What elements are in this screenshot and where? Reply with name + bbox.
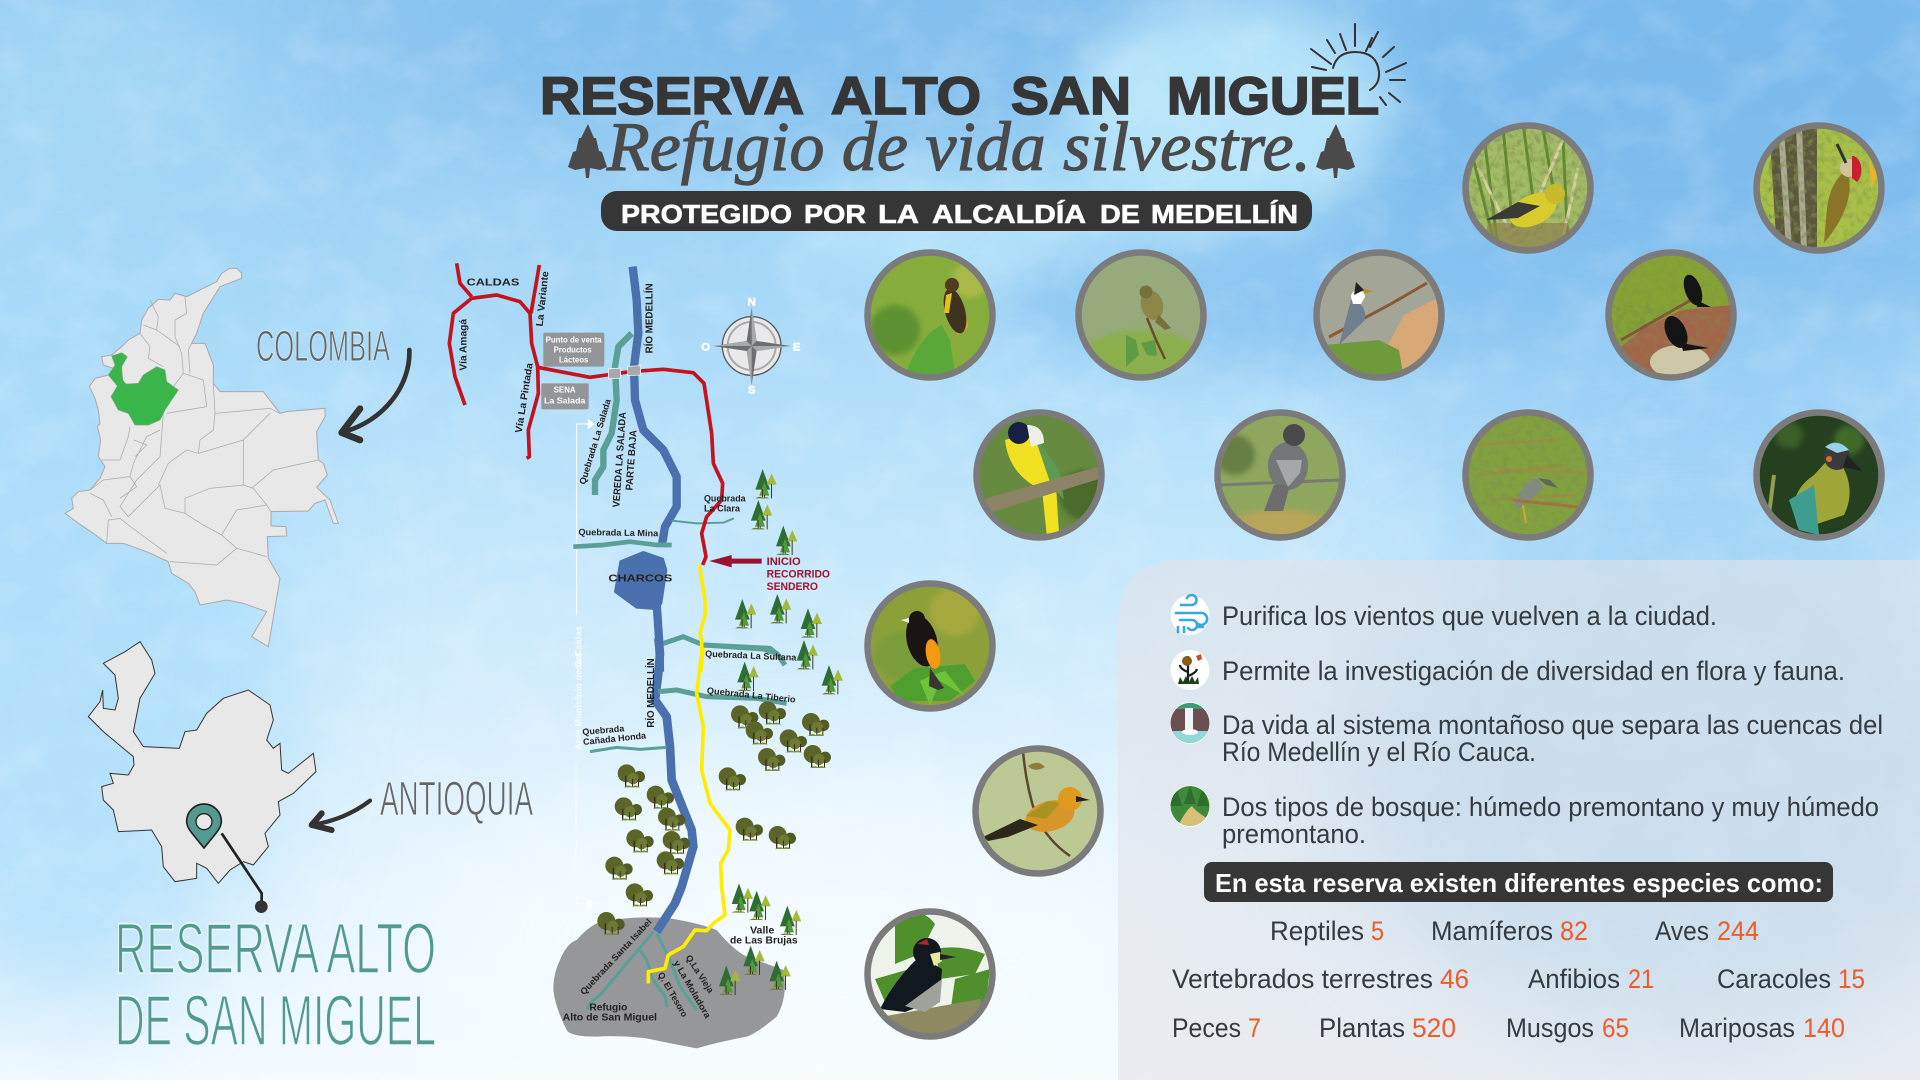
start-of-trail label: INICIO	[767, 556, 801, 568]
text: research: Permite la investigación de diversidad en flora y fauna.	[1222, 656, 1845, 686]
bird photo: kingfisher	[1314, 250, 1444, 380]
location pin and leader	[187, 804, 268, 913]
compass rose: S	[748, 384, 756, 396]
icon: right pine	[1316, 124, 1355, 178]
text: mountain system: Río Medellín y el Río Cauca.	[1222, 737, 1536, 767]
river Medellin	[655, 638, 693, 932]
sales point box: Lácteos	[559, 356, 589, 365]
creek La Sultana	[703, 645, 780, 657]
map labels: VEREDA LA SALADA	[611, 412, 629, 508]
map labels	[563, 649, 798, 1024]
species counts: 15	[1838, 964, 1865, 994]
species counts: 7	[1248, 1013, 1261, 1043]
start-of-trail arrow	[709, 555, 762, 567]
map labels: Quebrada La Tiberio	[706, 685, 797, 705]
map labels: Quebrada La Sultana	[705, 649, 798, 663]
map labels: La Variante	[535, 270, 551, 327]
map of Colombia	[65, 268, 338, 647]
subtitle: Refugio de vida silvestre: Refugio de vida silvestre.	[606, 109, 1311, 186]
species counts: 46	[1440, 964, 1469, 994]
map labels: y La Moladora	[672, 959, 713, 1021]
map labels: Quebrada La Salada	[577, 397, 613, 486]
title: Reserva Alto San Miguel: ALTO	[831, 67, 981, 126]
text: mountain system	[1222, 710, 1883, 767]
map labels: Refugio	[589, 1003, 627, 1014]
map labels: CHARCOS	[608, 574, 673, 585]
species counts: Reptiles	[1270, 916, 1364, 946]
map labels: Quebrada	[582, 723, 626, 737]
species heading bar: En esta reserva existen diferentes especies como:	[1215, 868, 1823, 898]
creek La Sultana	[662, 637, 785, 665]
panel: reserve facts	[1118, 560, 1920, 1080]
label: Reserva Alto de San Miguel	[115, 910, 436, 1061]
compass rose: E	[793, 342, 801, 354]
icon: forest	[1170, 785, 1210, 827]
title: Reserva Alto San Miguel: SAN	[1011, 67, 1131, 126]
pine clusters	[735, 469, 822, 638]
start-of-trail label: SENDERO	[767, 581, 818, 593]
map of Antioquia	[88, 642, 316, 913]
species counts: Musgos	[1506, 1013, 1594, 1043]
species counts: 140	[1803, 1013, 1845, 1043]
banner: protected by Medellin	[601, 191, 1312, 231]
species counts: Aves	[1655, 916, 1709, 946]
map labels: RÍO MEDELLÍN	[643, 283, 656, 353]
map labels: Vía La Pintada	[514, 362, 536, 434]
municipality label: de Caldas	[574, 626, 584, 670]
species counts: 82	[1560, 916, 1588, 946]
map labels: Q. El Tesoro	[656, 970, 690, 1019]
icon: left pine	[568, 124, 607, 178]
map labels: PARTE BAJA	[624, 430, 640, 491]
creeks in refuge	[587, 932, 697, 1010]
map labels: Alto de San Miguel	[563, 1013, 657, 1024]
bird photo: motmot	[1754, 410, 1884, 540]
map labels: Vía Amagá	[459, 319, 470, 371]
map labels: de Las Brujas	[730, 935, 798, 946]
bird photo: golden tanager	[973, 746, 1103, 876]
icon: waterfall	[1170, 702, 1210, 744]
map labels: Quebrada	[704, 494, 747, 504]
title: Reserva Alto San Miguel	[540, 67, 1379, 126]
arrow: Colombia	[342, 350, 409, 440]
start-of-trail label	[767, 556, 830, 593]
round tree clusters	[597, 701, 831, 935]
sales point box: Productos	[554, 345, 592, 354]
Charcos lake	[615, 552, 666, 609]
banner: protected by Medellin: MEDELLÍN	[1151, 199, 1298, 229]
map labels: CALDAS	[467, 278, 520, 289]
species counts: Plantas	[1319, 1013, 1405, 1043]
sales point box: Punto de venta	[546, 335, 602, 344]
bird photo: grey flycatcher	[1215, 410, 1345, 540]
species counts: Mamíferos	[1431, 916, 1553, 946]
trail map: lower part	[553, 638, 843, 1048]
icon: sun	[1311, 24, 1406, 105]
map labels: Quebrada Santa Isabel	[578, 917, 654, 997]
title: Reserva Alto San Miguel: MIGUEL	[1167, 67, 1379, 126]
SENA box: La Salada	[544, 396, 586, 406]
grey refuge area	[553, 917, 785, 1048]
banner: protected by Medellin: PROTEGIDO	[621, 199, 792, 229]
map labels: Quebrada La Mina	[578, 527, 659, 538]
trail map: upper part	[449, 263, 830, 672]
icon: flora and fauna	[1170, 650, 1210, 690]
boundary arrow	[576, 763, 594, 908]
map labels: Valle	[750, 925, 775, 936]
yellow trail	[699, 565, 705, 672]
area arrow	[577, 420, 594, 615]
text: forest types: premontano.	[1222, 819, 1366, 849]
species counts	[1172, 916, 1865, 1043]
SENA box	[541, 383, 589, 409]
text: forest types: Dos tipos de bosque: húmedo premontano y muy húmedo	[1222, 792, 1879, 822]
label: Antioquia: ANTIOQUIA	[380, 773, 533, 826]
text: forest types	[1222, 792, 1879, 849]
label: Reserva Alto de San Miguel: DE SAN MIGUEL	[115, 982, 436, 1061]
label: Colombia: COLOMBIA	[256, 322, 390, 371]
map labels: La Clara	[704, 504, 741, 514]
title: Reserva Alto San Miguel: RESERVA	[540, 67, 804, 126]
creek La Salada	[595, 333, 632, 495]
text: winds: Purifica los vientos que vuelven a la ciudad.	[1222, 601, 1717, 631]
species counts: Caracoles	[1717, 964, 1831, 994]
bird photo: striated heron on grass	[1463, 410, 1593, 540]
bird photo: yellow-hooded blackbird	[865, 250, 995, 380]
map labels	[459, 270, 747, 585]
bridges	[608, 366, 641, 379]
map labels: RÍO MEDELLÍN	[646, 658, 657, 728]
bird photo: black finches	[1606, 250, 1736, 380]
sales point box	[543, 333, 604, 367]
species counts: 65	[1602, 1013, 1629, 1043]
species counts: 21	[1628, 964, 1654, 994]
municipality label: Área Municipio de Cal	[574, 653, 584, 750]
bird photo: green jay	[974, 410, 1109, 540]
start-of-trail label: RECORRIDO	[767, 569, 830, 581]
species counts: Peces	[1172, 1013, 1241, 1043]
river Medellin	[633, 267, 677, 672]
text: mountain system: Da vida al sistema montañoso que separa las cuencas del	[1222, 710, 1883, 740]
species counts: Vertebrados terrestres	[1172, 964, 1433, 994]
label: Reserva Alto de San Miguel: RESERVA ALTO	[115, 910, 436, 989]
creek La Clara	[672, 518, 734, 523]
Antioquia highlight	[108, 353, 178, 425]
banner: protected by Medellin: LA	[878, 199, 919, 229]
bird photo: olive cardinal	[1076, 250, 1206, 390]
compass rose: O	[701, 342, 710, 354]
banner: protected by Medellin: POR	[804, 199, 866, 229]
banner: protected by Medellin: ALCALDÍA	[932, 199, 1086, 229]
icon: wind	[1170, 595, 1210, 635]
arrow: Antioquia	[312, 801, 370, 830]
creek La Tiberio	[658, 690, 787, 703]
banner: protected by Medellin: DE	[1100, 199, 1140, 229]
yellow trail	[648, 638, 730, 983]
species counts: Anfibios	[1528, 964, 1620, 994]
species counts: Mariposas	[1679, 1013, 1795, 1043]
bird photo: acorn woodpecker	[865, 909, 995, 1039]
map labels: Cañada Honda	[582, 730, 648, 747]
pine clusters	[719, 640, 843, 995]
bird photo: flame-rumped tanager	[865, 581, 995, 711]
map labels: Q.La Vieja	[684, 953, 716, 996]
red roads	[449, 263, 723, 565]
bird photo: yellow finch	[1463, 123, 1593, 253]
species counts: 244	[1717, 916, 1759, 946]
SENA box: SENA	[554, 384, 576, 394]
bird photo: woodpecker	[1754, 123, 1884, 253]
species counts: 520	[1412, 1013, 1456, 1043]
species counts: 5	[1371, 916, 1384, 946]
creek La Mina	[573, 542, 672, 547]
creek Canada Honda	[590, 747, 667, 752]
compass rose: N	[748, 296, 756, 308]
compass rose	[701, 296, 801, 396]
